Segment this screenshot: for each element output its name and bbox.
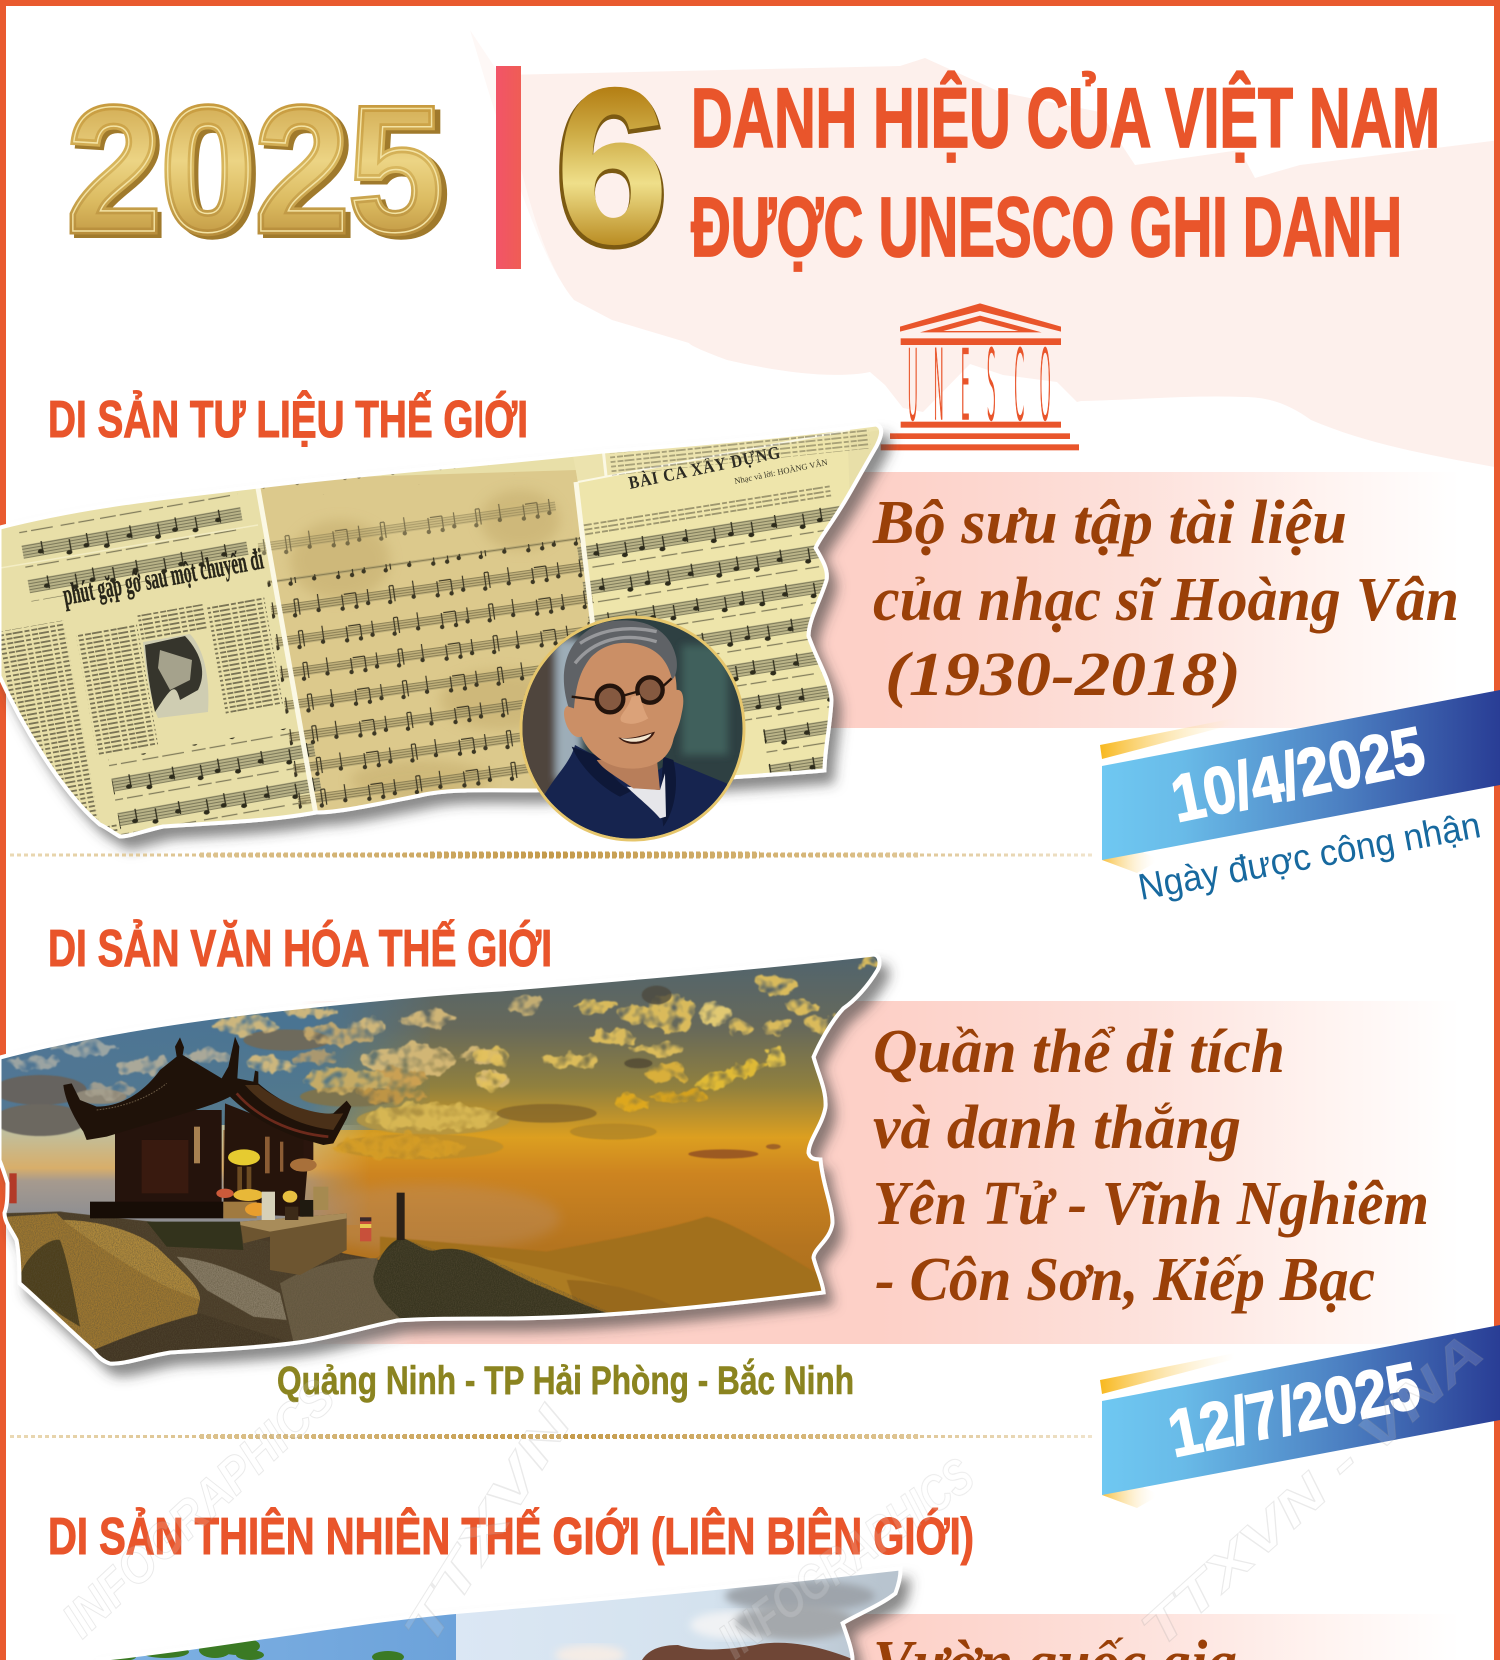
panel: national park background (800, 1614, 1460, 1660)
icon: UNESCO temple logo: N (933, 332, 944, 442)
text: Yên Tử complex: - Côn Sơn, Kiếp Bạc (875, 1246, 1375, 1314)
dark cloud accents and distant mountains (380, 986, 827, 1323)
sheet two staves (258, 498, 594, 809)
photo: Yên Tử pagoda at sunset (0, 943, 900, 1383)
panel: Yên Tử background (300, 1001, 1460, 1344)
vertical accent bar (496, 66, 521, 269)
flag and pole (397, 1193, 405, 1240)
date ribbon: 12/7/2025: 12/7/2025 (1162, 1348, 1426, 1471)
icon: UNESCO temple logo: C (1014, 332, 1024, 442)
face (564, 638, 683, 769)
divider (10, 1435, 1095, 1438)
icon: UNESCO temple logo (881, 303, 1079, 450)
neck (597, 757, 660, 790)
clouds right (472, 956, 878, 1112)
background brush map shape (470, 30, 1500, 468)
watermark: TTXVN (392, 1396, 583, 1656)
clouds left (7, 1006, 510, 1160)
panel: Hoàng Vân collection background (800, 472, 1460, 728)
icon: UNESCO temple logo: U (907, 332, 918, 442)
label: recognition date: Ngày được công nhận (1135, 804, 1484, 908)
watermark: INFOGRAPHICS (51, 1368, 345, 1648)
date ribbon: 12/7/2025 (1100, 1325, 1500, 1508)
pagoda (9, 1037, 405, 1241)
newspaper columns and staves (2, 494, 324, 834)
coat (544, 745, 727, 838)
icon: UNESCO temple logo: E (961, 332, 970, 442)
text: Hoàng Vân collection: Bộ sưu tập tài liệu (872, 489, 1347, 557)
stone platform wall (240, 1213, 347, 1275)
foreground rocks and path (0, 1037, 620, 1383)
text: Hoàng Vân collection (872, 489, 1459, 709)
text: Yên Tử complex (873, 1018, 1429, 1314)
photo: sheet music and newspaper collage (0, 415, 902, 885)
photo: national park (90, 1560, 906, 1660)
number 6 gold numeral: 6 (557, 45, 667, 288)
text: Yên Tử complex: Quần thể di tích (873, 1018, 1285, 1086)
icon: UNESCO temple logo: O (1039, 332, 1051, 442)
offerings (228, 1149, 260, 1165)
nose shadow (620, 695, 648, 724)
watermark (51, 1322, 1494, 1660)
photo: sheet music and newspaper collage: Nhạc và lời: HOÀNG VÂN (733, 457, 828, 486)
hair (564, 620, 677, 708)
text: Hoàng Vân collection: của nhạc sĩ Hoàng Vân (873, 566, 1459, 634)
date ribbon: 10/4/2025 (1100, 690, 1500, 873)
year 2025 gold numerals: 2025 (71, 74, 449, 273)
text: Yên Tử complex: và danh thắng (873, 1094, 1241, 1162)
watermark: TTXVN - VNA (1130, 1322, 1494, 1658)
heading: natural heritage: DI SẢN THIÊN NHIÊN THẾ GIỚI (LIÊN BIÊN GIỚI) (48, 1507, 974, 1566)
sheet title: BÀI CA XÂY DỰNG (627, 441, 783, 493)
portrait: musician Hoàng Vân (510, 610, 746, 850)
smile (618, 732, 655, 744)
newspaper headline: phút gặp gỡ sau một chuyến đi (60, 542, 266, 612)
glasses (597, 686, 623, 712)
date ribbon: 10/4/2025: 10/4/2025 (1165, 712, 1431, 836)
heading: cultural heritage: DI SẢN VĂN HÓA THẾ GIỚI (48, 919, 552, 978)
newspaper photo (143, 634, 208, 718)
number 6 gold numeral: 6 (555, 48, 668, 291)
divider (10, 854, 1095, 856)
solid dark cloud bands (0, 1029, 510, 1159)
title (691, 71, 1440, 274)
year 2025 gold numerals: 2025 (67, 70, 443, 269)
icon: UNESCO temple logo: S (987, 332, 996, 442)
text: Yên Tử complex: Yên Tử - Vĩnh Nghiêm (873, 1170, 1429, 1238)
text: Hoàng Vân collection: (1930-2018) (885, 641, 1241, 709)
caption: locations: Quảng Ninh - TP Hải Phòng - Bắc Ninh (277, 1357, 854, 1403)
heading: documentary heritage: DI SẢN TƯ LIỆU THẾ GIỚI (48, 390, 528, 449)
year 2025 gold numerals: 2025 (67, 70, 443, 269)
